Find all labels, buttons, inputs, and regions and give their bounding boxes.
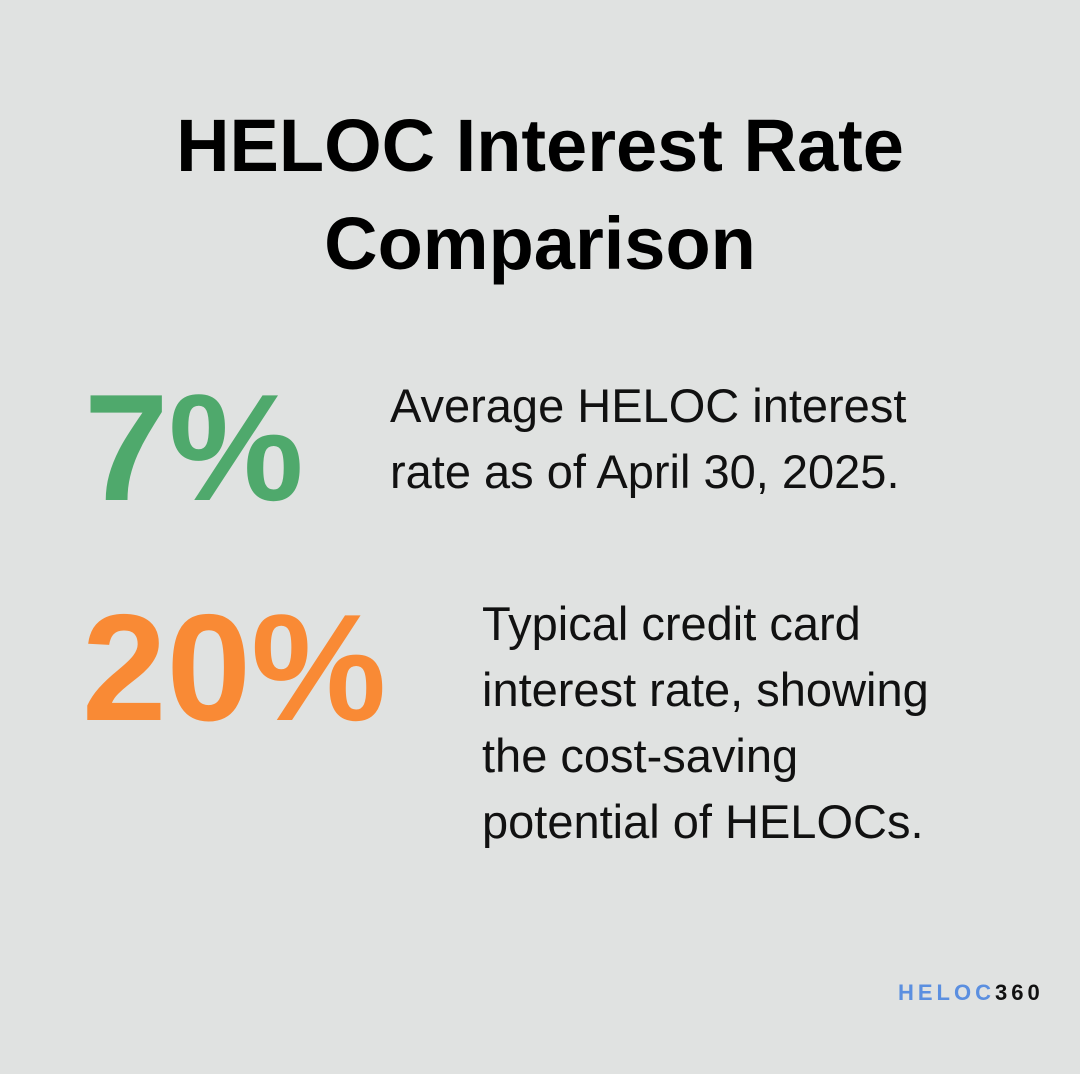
text: 20% description: Typical credit card — [482, 597, 861, 650]
text: 7% description: Average HELOC interest — [390, 379, 906, 432]
title: HELOC Interest Rate — [176, 104, 904, 187]
text: 7% description: rate as of April 30, 2025. — [390, 445, 900, 498]
logo: HELOC360 — [898, 980, 1044, 1005]
title — [176, 104, 904, 285]
text: 20% description — [482, 597, 929, 848]
text: 20% description: potential of HELOCs. — [482, 795, 924, 848]
text: 20% description: interest rate, showing — [482, 663, 929, 716]
title: Comparison — [324, 202, 756, 285]
stat: 7%: 7% — [84, 363, 304, 533]
stat: 20%: 20% — [82, 583, 386, 753]
text: 20% description: the cost-saving — [482, 729, 798, 782]
text: 7% description — [390, 379, 906, 498]
